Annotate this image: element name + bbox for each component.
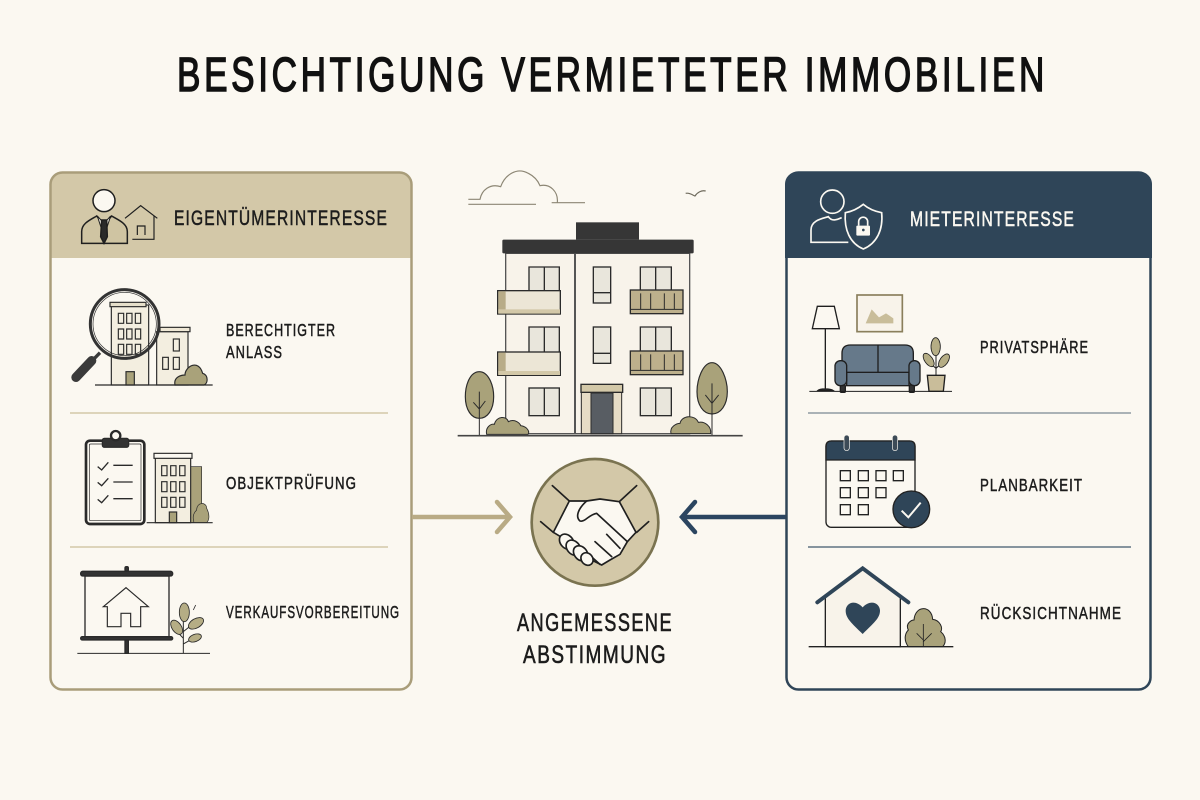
icon: cloud — [468, 171, 585, 204]
panel header: Eigentümerinteresse — [50, 172, 412, 258]
icon: right bush — [671, 417, 711, 434]
icon: clipboard and building — [86, 431, 213, 524]
icon: presentation board with house and plant — [77, 567, 210, 653]
icon: right tree — [697, 363, 727, 435]
label: Planbarkeit: PLANBARKEIT — [980, 475, 1083, 495]
label: Privatsphäre: PRIVATSPHÄRE — [980, 337, 1089, 357]
panel: Mieterinteresse — [785, 172, 1152, 690]
icon: magnifier on buildings — [76, 290, 213, 385]
icon: living room — [809, 295, 952, 392]
label: Rücksichtnahme: RÜCKSICHTNAHME — [980, 603, 1122, 623]
arrow: owner to agreement — [412, 502, 510, 532]
icon: bird — [686, 191, 706, 196]
panel header: Mieterinteresse — [785, 172, 1152, 258]
arrow: tenant to agreement — [682, 502, 786, 532]
icon: handshake — [532, 459, 658, 586]
label: Berechtigter Anlass — [226, 320, 336, 362]
icon: left tree — [465, 372, 494, 435]
panel: Eigentümerinteresse — [50, 172, 412, 690]
illustration: apartment building — [458, 171, 743, 436]
label: Verkaufsvorbereitung: VERKAUFSVORBEREITUNG — [226, 602, 400, 622]
icon: left bush — [486, 417, 529, 434]
label: Eigentümerinteresse: EIGENTÜMERINTERESSE — [174, 207, 388, 230]
label: Objektprüfung: OBJEKTPRÜFUNG — [226, 473, 357, 493]
icon: house with heart — [809, 568, 953, 647]
label: Mieterinteresse: MIETERINTERESSE — [910, 208, 1075, 231]
icon: calendar with check — [826, 435, 930, 528]
icon: owner with house — [82, 190, 157, 243]
label: Angemessene Abstimmung: ABSTIMMUNG — [523, 641, 667, 669]
icon: tenant with shield — [811, 190, 882, 249]
label: Berechtigter Anlass: BERECHTIGTER — [226, 320, 336, 340]
label: Berechtigter Anlass: ANLASS — [226, 342, 283, 362]
label: Angemessene Abstimmung — [517, 609, 673, 669]
label: Angemessene Abstimmung: ANGEMESSENE — [517, 609, 673, 637]
